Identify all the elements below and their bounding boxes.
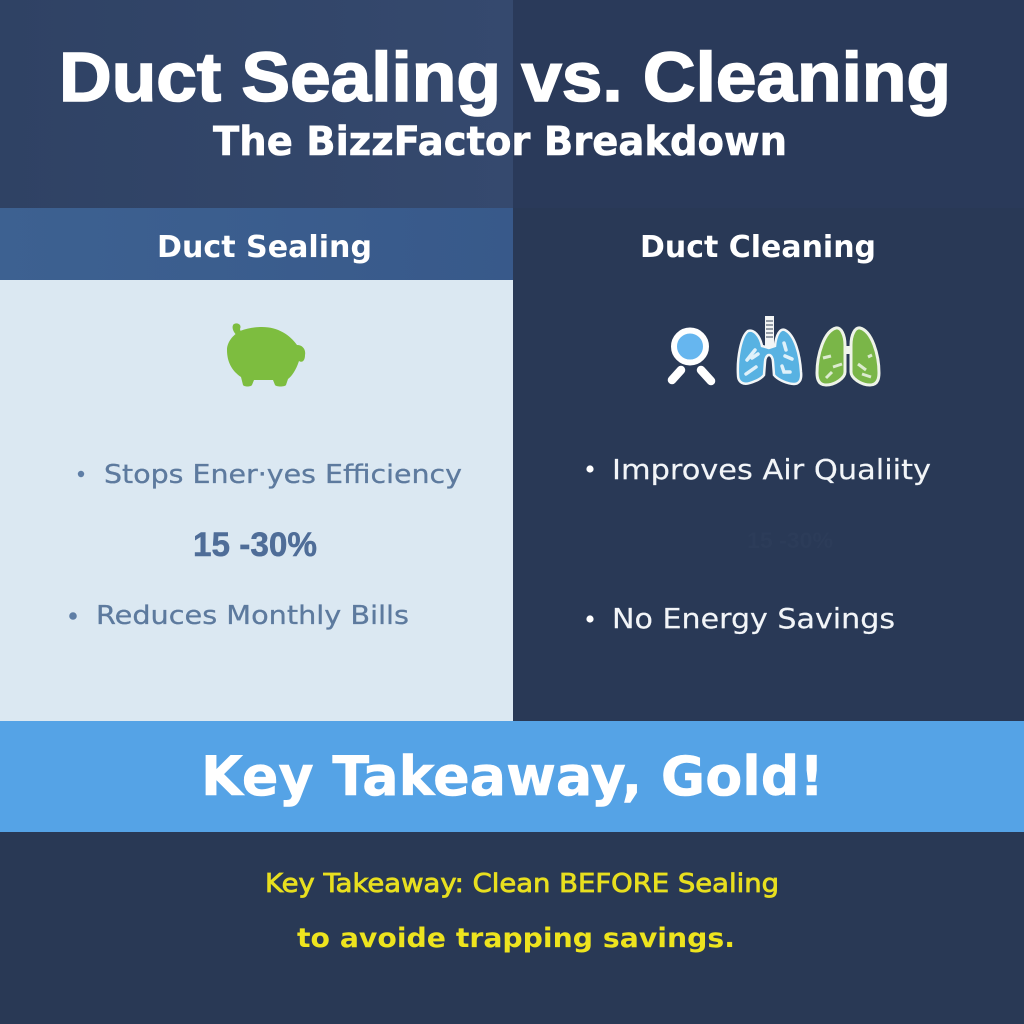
bullet: improves air quality: Improves Air Qualiity: [612, 453, 931, 486]
bullet: reduces bills: Reduces Monthly Bills: [96, 601, 409, 631]
icon: blue lungs: [738, 316, 801, 384]
bullet: stops energy: Stops Ener·yes Efficiency: [104, 460, 462, 490]
footer text line 1: Key Takeaway: Clean BEFORE Sealing: [265, 869, 779, 899]
footer panel: [0, 832, 1024, 1024]
subtitle: The BizzFactor Breakdown: [213, 119, 787, 165]
title: Duct Sealing vs. Cleaning: [59, 38, 951, 116]
background: header right: [513, 0, 1024, 208]
footer text line 2: to avoide trapping savings.: [297, 923, 735, 954]
heading: duct cleaning: Duct Cleaning: [640, 230, 876, 265]
panel body: duct sealing: [0, 280, 513, 721]
background: header left: [0, 0, 513, 208]
panel body: duct cleaning: [513, 208, 1024, 721]
banner: key takeaway: Key Takeaway, Gold!: [201, 745, 824, 808]
statistic: 15-30%: 15 -30%: [193, 526, 317, 564]
panel: duct cleaning: [513, 208, 1024, 721]
panel header: duct sealing: [0, 208, 513, 280]
icon: green lungs: [817, 328, 879, 385]
heading: duct sealing: Duct Sealing: [157, 230, 372, 265]
icon: piggy bank: [227, 323, 305, 386]
banner: key takeaway: [0, 721, 1024, 832]
bullet: no energy savings: No Energy Savings: [612, 602, 895, 635]
panel: duct sealing: [0, 208, 513, 721]
faint ghost figure: 15 -30%: [747, 528, 833, 553]
icon: magnifier: [672, 330, 711, 381]
